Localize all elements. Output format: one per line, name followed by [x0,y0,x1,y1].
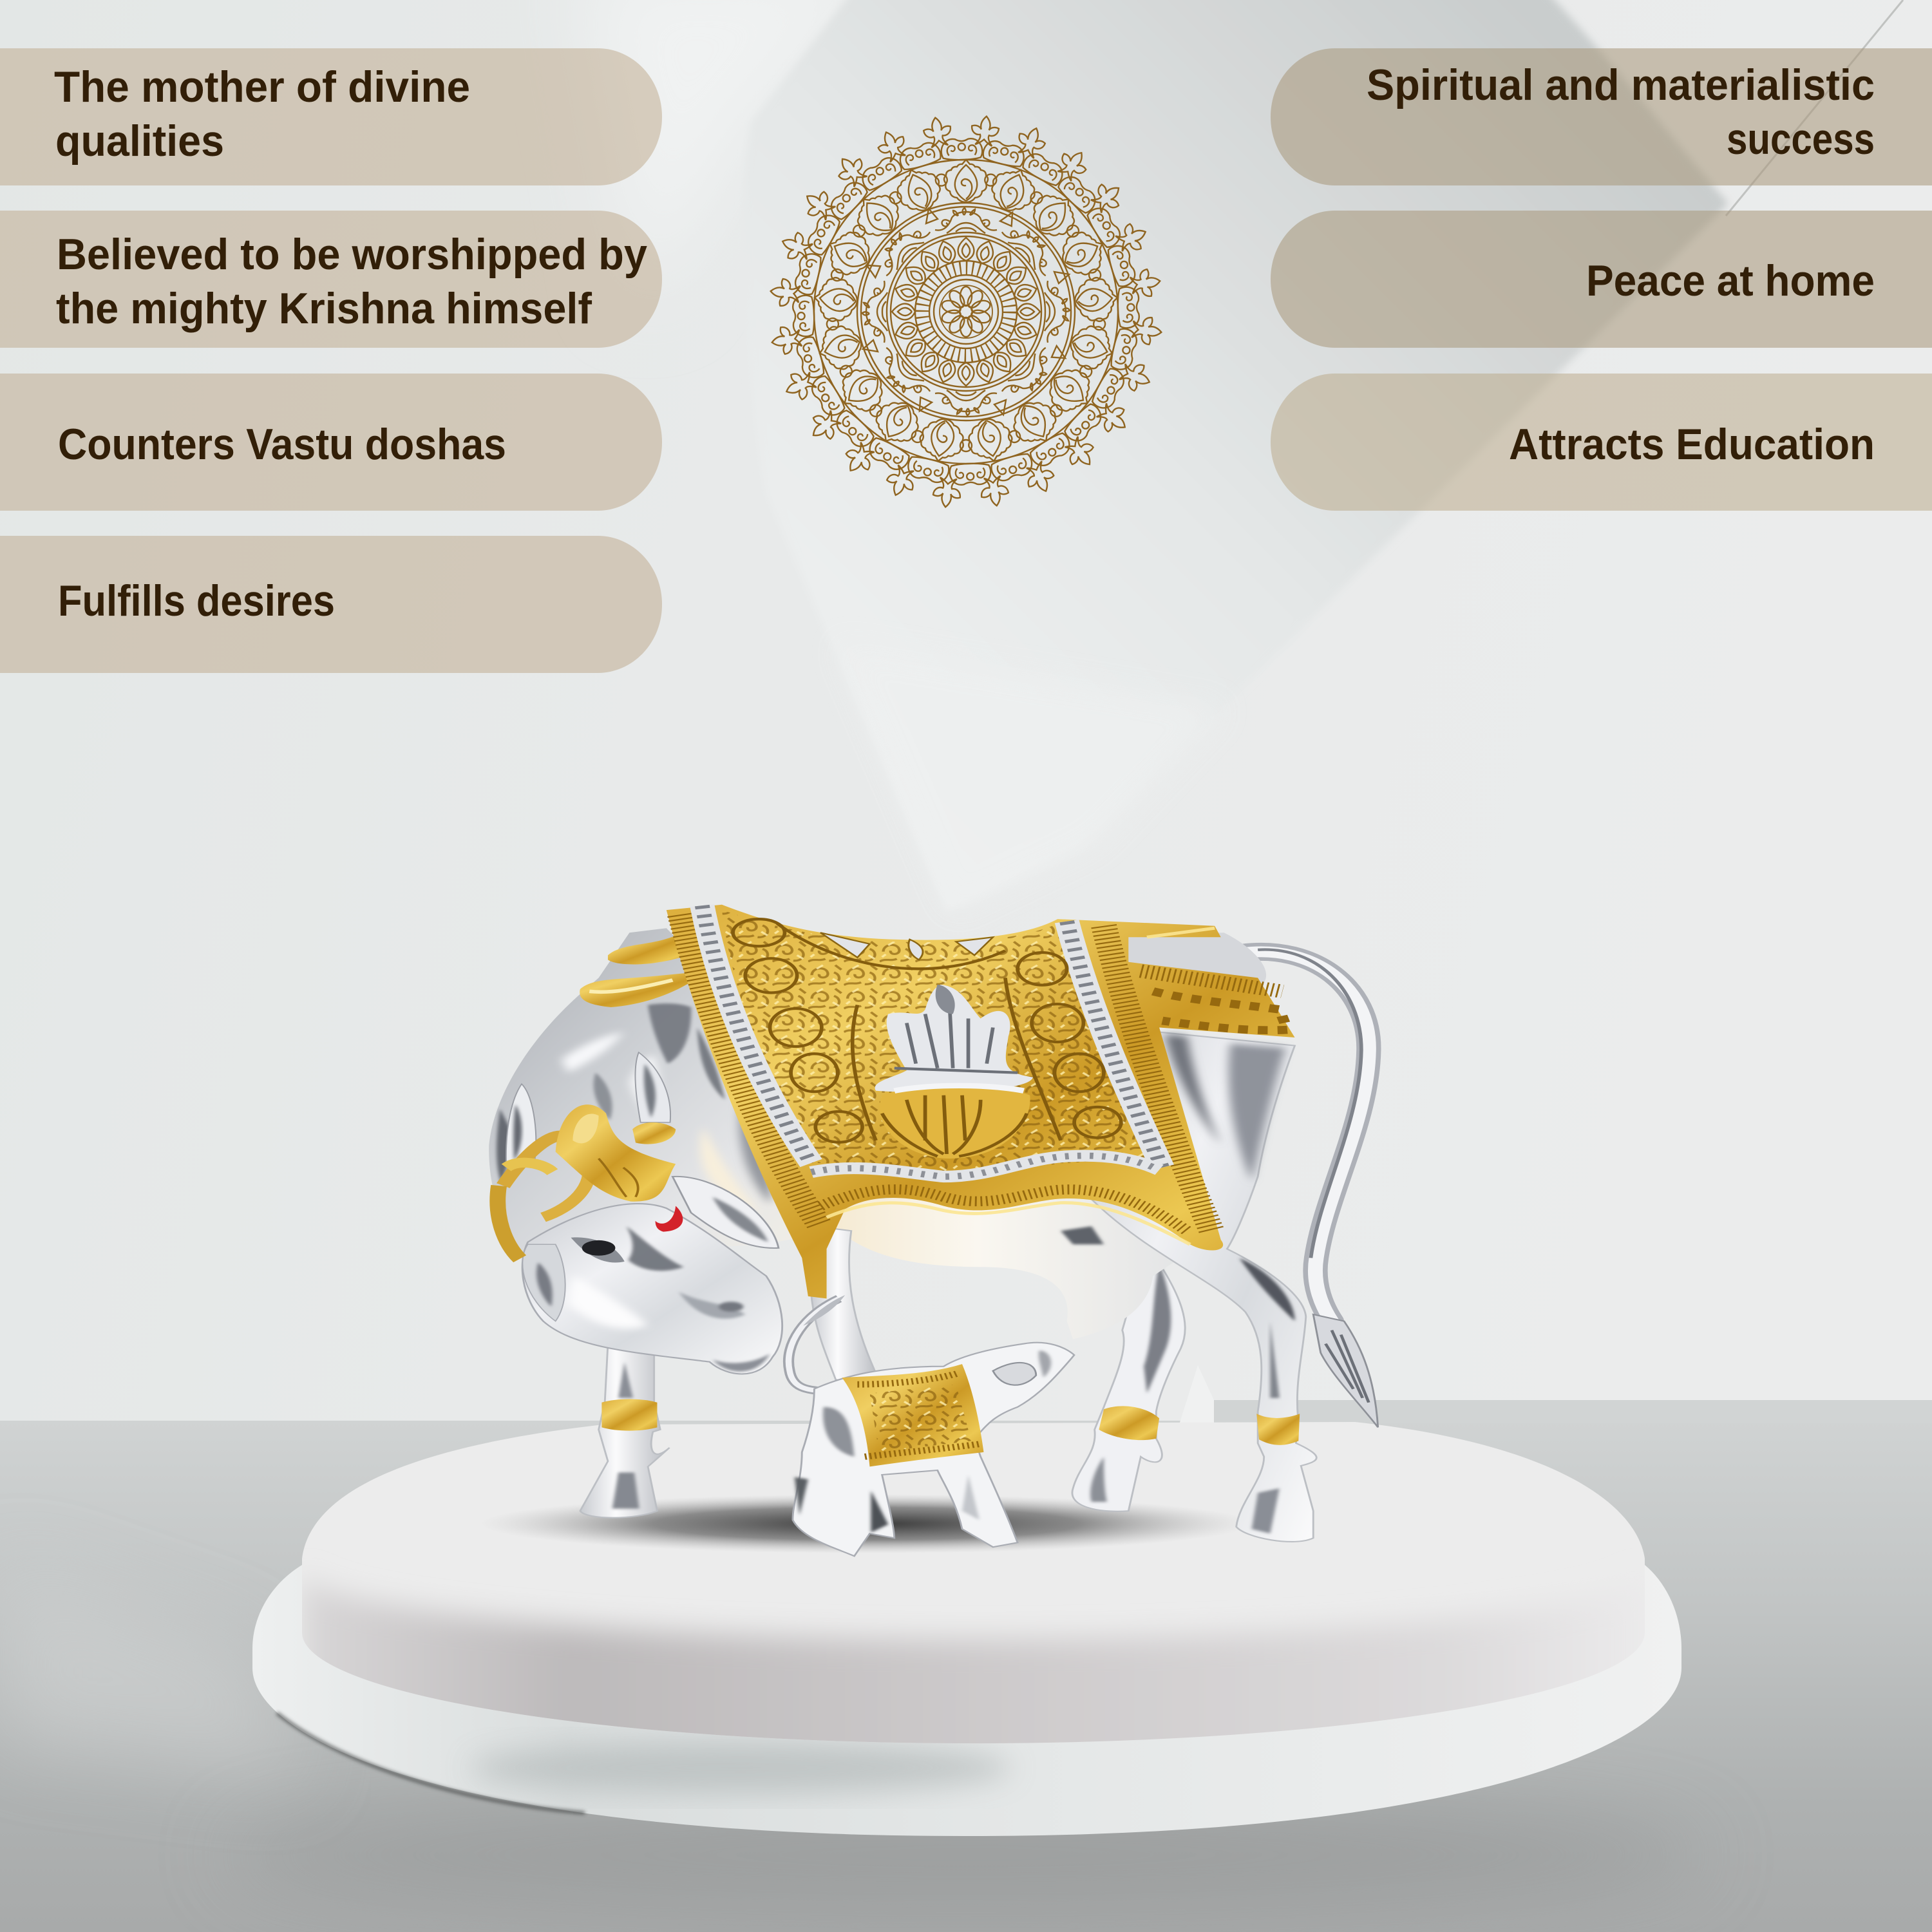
cow shadow on podium [480,1494,1253,1553]
panel: left benefit 4 [0,536,662,673]
podium [252,1422,1681,1836]
panel: left benefit 1 [0,48,662,185]
background wall [0,0,1932,1423]
panel: right benefit 3: Attracts Education [1509,420,1875,469]
panel: right benefit 2: Peace at home [1586,256,1875,305]
cow front right leg [810,1226,879,1380]
panel: right benefit 2 [1271,211,1932,348]
cow front left leg [580,1344,670,1518]
cow head [522,1204,782,1374]
floor [0,1365,1932,1932]
panel: left benefit 2 [0,211,662,348]
cow gold headdress [498,1104,676,1259]
panel: left benefit 1: qualities [55,117,224,166]
icon: gold mandala [750,96,1182,527]
podium base ring [252,1565,1681,1836]
cow forehead tilak [656,1206,683,1232]
cow horns [506,1052,670,1165]
saddle top silver motifs [820,933,993,960]
saddle silver beaded stripes [702,905,1162,1177]
saddle right fringe [1153,991,1287,1030]
cow tail [1242,950,1378,1427]
saddle Lakshmi figure [875,985,1033,1159]
cow neck and shoulder [489,928,833,1258]
podium upper drum [302,1422,1645,1743]
calf gold saddle [842,1364,983,1466]
cow ornate gold saddle blanket [667,905,1295,1298]
saddle hatched borders [680,914,1282,1231]
background diagonal light line [1726,0,1903,216]
panel: left benefit 1: The mother of divine [54,62,470,111]
illustration: silver and gold cow with calf [489,905,1378,1556]
panel: right benefit 1 [1271,48,1932,185]
cow far hind leg [1072,1244,1185,1511]
calf tail [789,1295,845,1391]
panel: right benefit 3 [1271,374,1932,511]
calf body [793,1343,1074,1556]
cow belly [814,1186,1221,1340]
cow gold shoulder bands [580,933,706,1007]
saddle smooth gold folds [827,928,1215,1244]
panel: right benefit 1: success [1727,115,1875,164]
cow rump window [1125,933,1266,982]
panel: left benefit 2: the mighty Krishna himself [56,284,592,333]
panel: left benefit 4: Fulfills desires [58,576,335,625]
cow near hind leg [1061,1032,1316,1542]
saddle scrollwork texture [722,910,1156,1172]
panel: left benefit 2: Believed to be worshipped by [57,230,647,279]
saddle engraved medallions [733,919,1121,1142]
panel: left benefit 3 [0,374,662,511]
panel: right benefit 1: Spiritual and materialistic [1367,61,1875,109]
panel: left benefit 3: Counters Vastu doshas [58,420,506,469]
cow ears [672,1177,779,1248]
